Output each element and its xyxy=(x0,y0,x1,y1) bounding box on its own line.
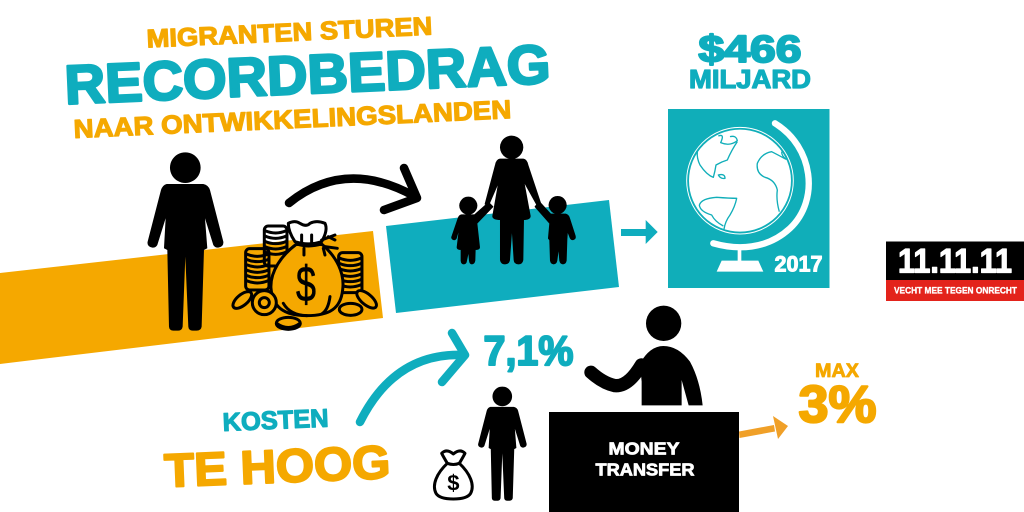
panel: money transfer desk xyxy=(549,412,739,512)
right coin stack xyxy=(339,253,362,293)
globe stand xyxy=(717,249,763,272)
title line 2: RECORDBEDRAG xyxy=(63,33,552,116)
label KOSTEN: KOSTEN xyxy=(222,405,329,437)
logo text: 11.11.11 xyxy=(898,242,1012,280)
label MAX: MAX xyxy=(815,361,859,382)
woman xyxy=(485,136,541,264)
icon: clerk xyxy=(591,306,703,405)
value 3%: 3% xyxy=(798,376,876,434)
icon: money bag with coins xyxy=(230,222,379,329)
girl xyxy=(452,197,493,264)
year: 2017 xyxy=(774,252,822,276)
boy xyxy=(535,197,575,264)
arrow: teal to globe xyxy=(621,220,658,244)
arrow: teal curved up xyxy=(360,333,465,422)
amount value: $466 xyxy=(698,29,802,71)
percentage 7,1%: 7,1% xyxy=(484,327,574,374)
desk label line 1: MONEY xyxy=(608,438,680,458)
title line 3: NAAR ONTWIKKELINGSLANDEN xyxy=(73,94,512,144)
amount unit: MILJARD xyxy=(689,66,811,94)
dollar sign: $ xyxy=(296,256,316,312)
panel: globe 2017 xyxy=(668,109,830,288)
teal band xyxy=(386,200,619,313)
back coin stack xyxy=(264,226,287,266)
coins in front xyxy=(230,288,379,329)
bag body xyxy=(271,244,343,316)
label TE HOOG: TE HOOG xyxy=(163,435,391,497)
left coin stack xyxy=(246,249,269,290)
icon: migrant man xyxy=(148,152,223,331)
orange band xyxy=(0,231,383,364)
icon: globe xyxy=(687,123,809,272)
globe arm xyxy=(713,123,809,247)
icon: small man xyxy=(478,387,527,501)
arrow: orange xyxy=(739,416,788,439)
icon: small money bag xyxy=(434,451,472,499)
logo 11.11.11 xyxy=(886,242,1024,301)
title xyxy=(63,13,552,144)
icon: small money bag: $ xyxy=(447,471,459,496)
bag top xyxy=(288,222,326,244)
amount xyxy=(689,29,811,94)
title line 1: MIGRANTEN STUREN xyxy=(146,13,433,53)
arrow: black curved xyxy=(289,168,417,210)
desk label line 2: TRANSFER xyxy=(596,460,695,480)
icon: family xyxy=(452,136,575,264)
